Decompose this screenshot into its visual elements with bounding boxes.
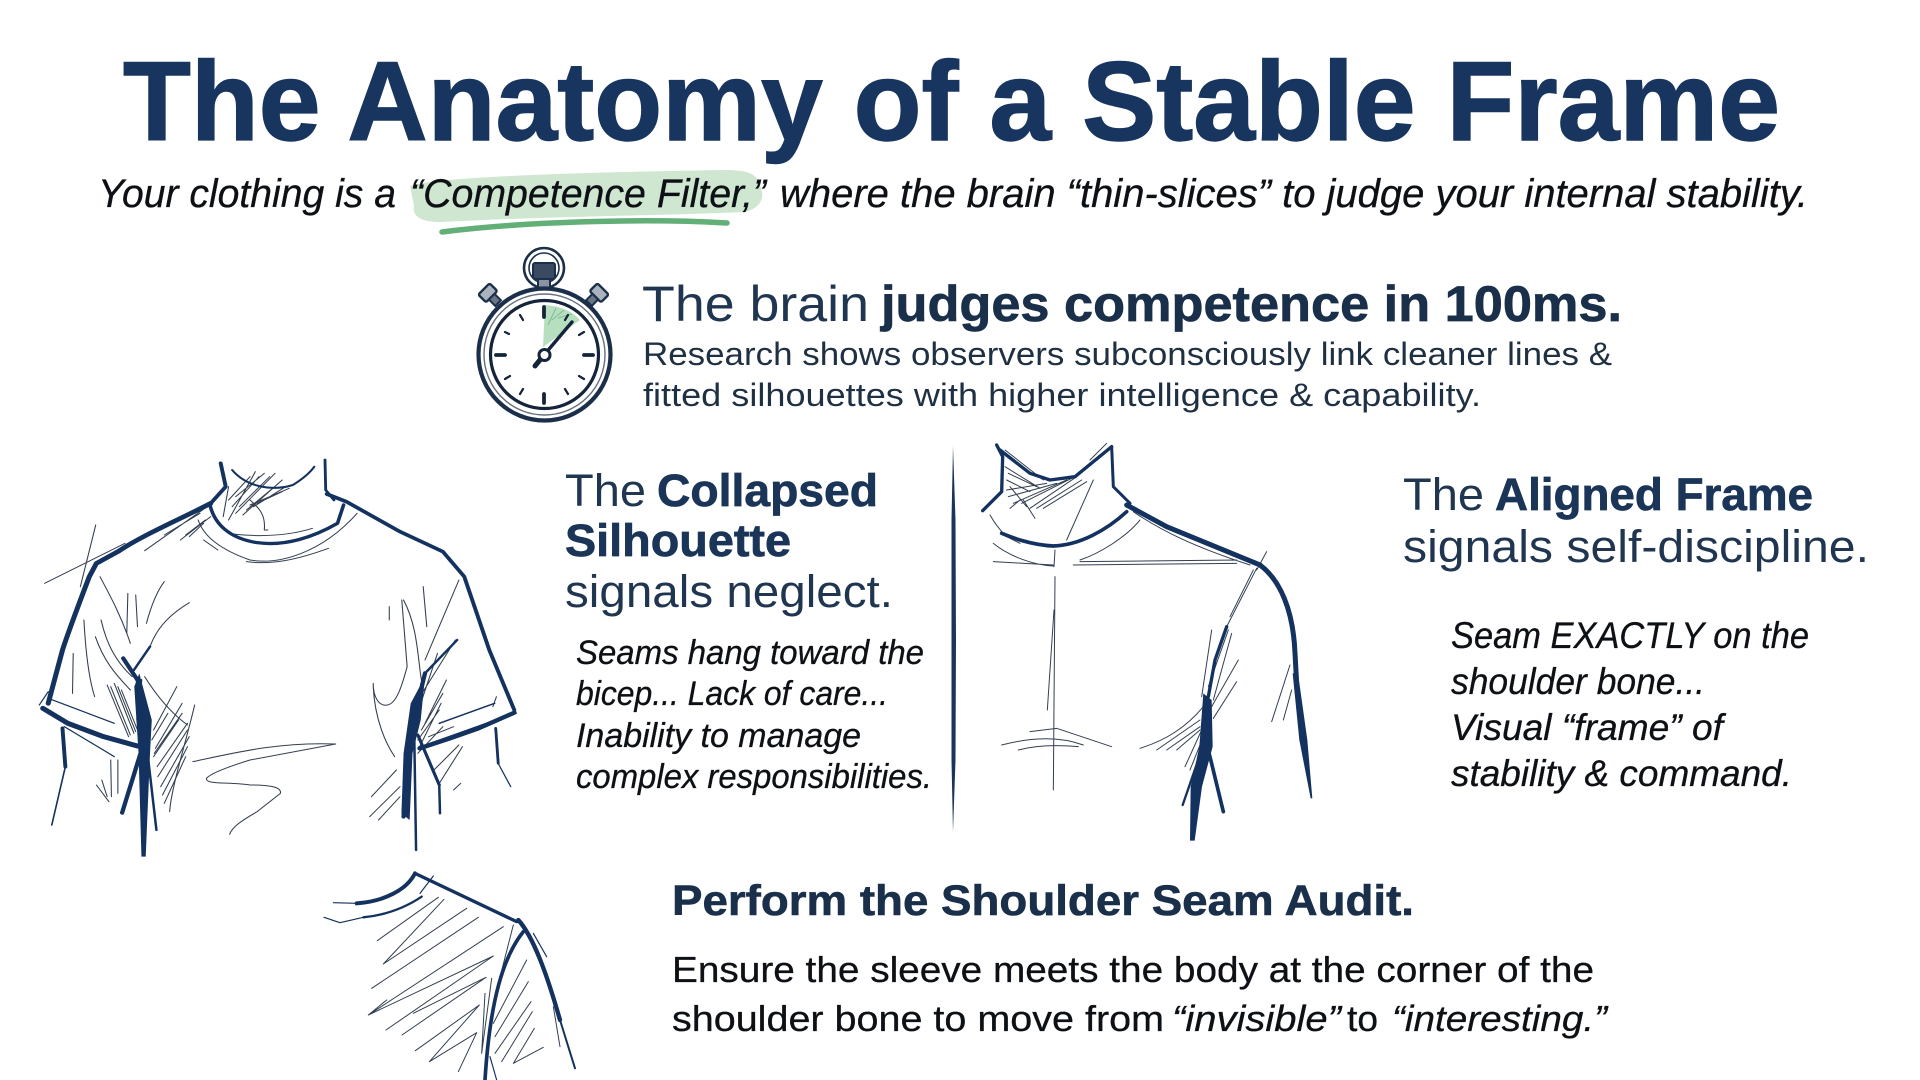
sketch: shoulder seam detail <box>324 873 575 1080</box>
text: collapsed description: Seams hang toward the <box>576 634 924 672</box>
sketch: collapsed t-shirt <box>39 460 516 857</box>
text: aligned description: Seam EXACTLY on the <box>1451 615 1809 656</box>
title: The Anatomy of a Stable Frame <box>123 39 1780 164</box>
heading: aligned frame: Aligned Frame <box>1495 469 1813 520</box>
text: audit instructions: “invisible” <box>1172 998 1343 1039</box>
text: collapsed description: complex responsibilities. <box>576 758 932 796</box>
subtitle: “Competence Filter,” <box>410 172 768 216</box>
subtitle: Your clothing is a <box>98 172 396 216</box>
text: research note: fitted silhouettes with higher intelligence & capability. <box>643 377 1481 413</box>
text: collapsed description: bicep... Lack of care... <box>576 675 888 713</box>
heading: brain judges competence: The brain <box>642 276 869 332</box>
subtitle <box>98 172 1808 216</box>
heading: collapsed silhouette: signals neglect. <box>565 566 893 617</box>
text: aligned description: stability & command. <box>1451 753 1792 794</box>
text: audit instructions: shoulder bone to move from <box>672 998 1164 1039</box>
text: aligned description: shoulder bone... <box>1451 661 1705 702</box>
text: audit instructions: “interesting.” <box>1392 998 1609 1039</box>
heading: collapsed silhouette <box>565 465 893 617</box>
icon: stopwatch <box>478 248 610 420</box>
heading: aligned frame: signals self-discipline. <box>1403 521 1869 572</box>
text: research note: Research shows observers subconsciously link cleaner lines & <box>643 336 1612 372</box>
heading: aligned frame <box>1403 469 1869 572</box>
heading: collapsed silhouette: Silhouette <box>565 515 791 566</box>
heading: brain judges competence: judges competence in 100ms. <box>880 276 1622 332</box>
divider <box>952 446 956 832</box>
text: aligned description: Visual “frame” of <box>1451 707 1727 748</box>
text: audit instructions <box>672 949 1609 1039</box>
text: aligned description <box>1451 615 1809 794</box>
sketch: aligned frame <box>983 443 1312 841</box>
text: audit instructions: Ensure the sleeve meets the body at the corner of the <box>672 949 1594 990</box>
heading: collapsed silhouette: The <box>565 465 646 516</box>
highlight: green brush behind Competence Filter <box>410 170 762 232</box>
subtitle: where the brain “thin-slices” to judge your internal stability. <box>780 172 1808 216</box>
heading: aligned frame: The <box>1403 469 1484 520</box>
heading: collapsed silhouette: Collapsed <box>657 465 878 516</box>
text: research note <box>643 336 1612 413</box>
heading: shoulder seam audit: Perform the Shoulder Seam Audit. <box>672 877 1414 925</box>
text: audit instructions: to <box>1347 998 1378 1039</box>
text: collapsed description <box>576 634 932 796</box>
text: collapsed description: Inability to manage <box>576 717 861 755</box>
